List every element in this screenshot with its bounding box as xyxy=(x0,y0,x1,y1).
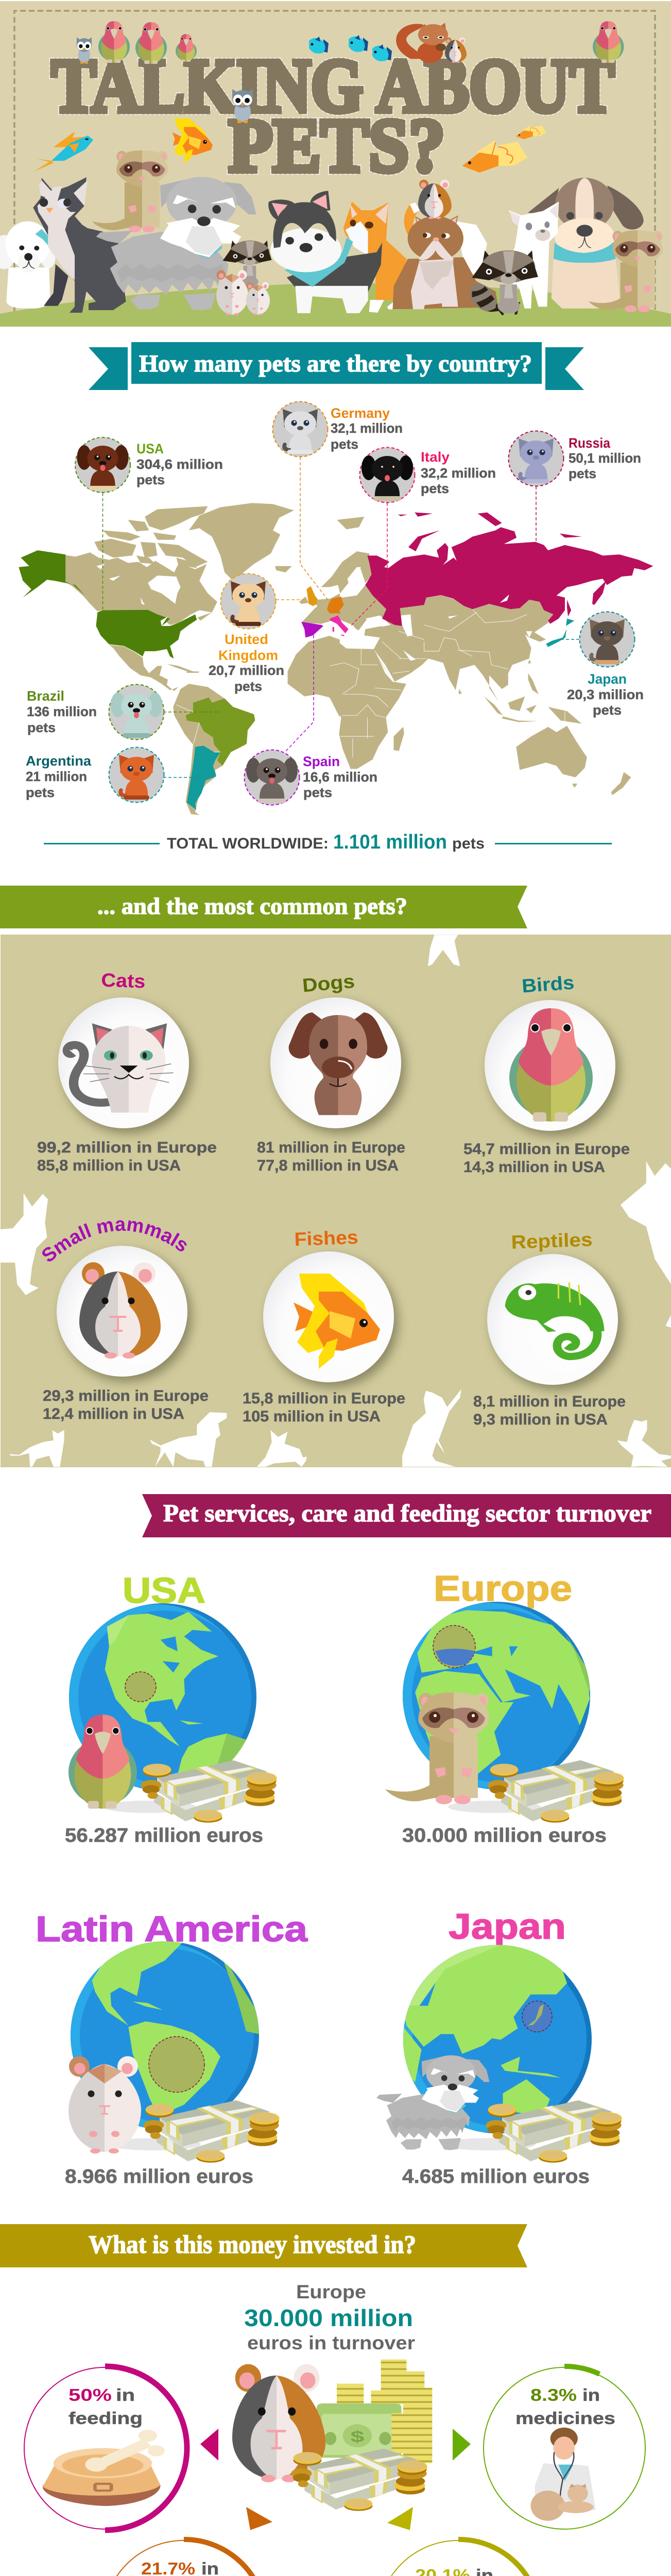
total worldwide xyxy=(44,831,612,853)
callout: USA: pets xyxy=(136,472,165,487)
japan xyxy=(546,619,574,647)
plate: small mammals: 29,3 million in Europe xyxy=(43,1387,209,1404)
circle: medicines: medicines xyxy=(515,2409,615,2428)
icon: bowl and bone xyxy=(43,2430,165,2506)
usa xyxy=(96,610,197,658)
callout: Japan: 20,3 million xyxy=(567,687,644,702)
banner: how many pets: How many pets are there by country? xyxy=(139,350,532,377)
plate: fishes: Fishes xyxy=(294,1227,358,1250)
circle: accessories xyxy=(103,2539,265,2576)
plate: small mammals xyxy=(42,1220,209,1422)
callout: United Kingdom: United xyxy=(225,632,268,647)
region: Europe turnover: 30.000 million euros xyxy=(402,1825,607,1846)
plate: fishes xyxy=(243,1227,405,1425)
callout: Spain: 16,6 million xyxy=(303,769,377,785)
icon: big dog xyxy=(528,178,644,309)
plate: reptiles: 8,1 million in Europe xyxy=(473,1393,626,1410)
callout: Spain: pets xyxy=(303,785,332,800)
text: Europe turnover headline: 30.000 million xyxy=(244,2304,413,2331)
plate: cats: Cats xyxy=(101,970,146,992)
icon: small raccoon xyxy=(223,241,271,287)
callout: USA xyxy=(75,437,223,493)
plate: reptiles: 9,3 million in USA xyxy=(473,1411,608,1428)
callout: Argentina xyxy=(26,747,164,803)
uk xyxy=(306,586,320,606)
callout: Russia: pets xyxy=(569,466,596,481)
hero panel: title and pets xyxy=(0,1,671,327)
icon: birds on title xyxy=(77,21,624,123)
callout lines xyxy=(103,457,579,777)
icon: tall ferret xyxy=(92,150,168,232)
banner: what is this money invested in: What is this money invested in? xyxy=(89,2230,416,2259)
spain xyxy=(301,622,323,637)
icon: orange cat xyxy=(343,201,487,313)
callout: USA: 304,6 million xyxy=(136,456,223,472)
text: Europe turnover headline: Europe xyxy=(296,2281,366,2302)
illustration: guinea pig with money: $ xyxy=(350,2427,364,2445)
icon: brown cat with guinea pig xyxy=(392,180,498,309)
ground xyxy=(0,283,671,327)
plate: birds: 14,3 million in USA xyxy=(463,1159,605,1176)
circle: medicines xyxy=(484,2366,645,2529)
plate: small mammals: 12,4 million in USA xyxy=(43,1405,184,1422)
banner: sector turnover: Pet services, care and feeding sector turnover xyxy=(163,1500,651,1527)
icon: white cat xyxy=(502,201,559,309)
callout: Germany xyxy=(273,402,403,456)
callout: Russia xyxy=(509,431,641,486)
circle: medicines: 8.3% xyxy=(530,2385,577,2404)
region: USA turnover: USA xyxy=(123,1570,205,1611)
callout: Japan: pets xyxy=(593,702,622,718)
banner: most common pets: ... and the most common pets? xyxy=(97,893,407,919)
callout: Russia: Russia xyxy=(569,435,611,451)
plate: dogs: 81 million in Europe xyxy=(257,1139,405,1156)
callout: Germany: 32,1 million xyxy=(331,420,403,436)
total worldwide: TOTAL WORLDWIDE: xyxy=(167,835,329,852)
callout: Russia: 50,1 million xyxy=(569,450,641,466)
icon: raccoon xyxy=(470,250,538,315)
plate: dogs: Dogs xyxy=(301,971,356,996)
alaska xyxy=(19,550,85,598)
total worldwide: 1.101 million xyxy=(333,831,447,853)
hudson bay xyxy=(148,575,180,604)
circle: services xyxy=(377,2539,539,2576)
circle: feeding: 50% xyxy=(68,2385,112,2404)
callout: Germany: Germany xyxy=(331,405,390,421)
title: Talking about pets: PETS? xyxy=(229,104,445,188)
plate: small mammals: Small mammals xyxy=(42,1220,186,1261)
western hemisphere xyxy=(19,503,340,815)
silhouettes xyxy=(0,935,671,1467)
globe xyxy=(398,1941,595,2137)
icon: husky xyxy=(268,191,382,313)
italy xyxy=(330,616,349,636)
callout: Brazil: Brazil xyxy=(27,688,64,704)
banner: how many pets xyxy=(89,342,584,390)
plate: dogs xyxy=(257,971,405,1174)
callout: Italy: 32,2 million xyxy=(421,465,496,481)
western europe and africa xyxy=(301,594,340,625)
region: Europe turnover xyxy=(385,1568,624,1846)
callout: Italy: pets xyxy=(421,481,449,496)
icon: black and white cat xyxy=(33,177,126,313)
banner: sector turnover xyxy=(142,1494,671,1537)
plate: reptiles: Reptiles xyxy=(511,1229,593,1253)
icon: vet with cat xyxy=(530,2428,596,2521)
greenland xyxy=(189,503,294,581)
plate: birds: 54,7 million in Europe xyxy=(463,1141,630,1158)
arrows xyxy=(200,2429,471,2530)
banner: most common pets xyxy=(0,886,527,928)
plate: cats: 85,8 million in USA xyxy=(37,1157,181,1174)
title: Talking about pets xyxy=(51,44,614,188)
circle: feeding xyxy=(24,2366,187,2530)
callout: Japan xyxy=(567,612,644,718)
region: USA turnover xyxy=(64,1570,277,1846)
callout: United Kingdom: Kingdom xyxy=(218,648,278,663)
globe xyxy=(398,1600,592,1789)
russia xyxy=(365,513,653,626)
callout: Germany: pets xyxy=(331,436,358,452)
globe xyxy=(64,1602,259,1794)
callout: Italy: Italy xyxy=(421,449,450,465)
callout: Spain: Spain xyxy=(303,754,340,769)
circle: medicines: in xyxy=(582,2385,600,2404)
plate: birds xyxy=(463,972,630,1176)
illustration: guinea pig with money xyxy=(232,2360,432,2511)
plate: reptiles xyxy=(473,1229,626,1428)
eastern hemisphere xyxy=(288,513,653,795)
south america xyxy=(173,684,255,815)
brazil xyxy=(186,698,255,766)
argentina xyxy=(187,746,220,810)
text: Europe turnover headline: euros in turnover xyxy=(247,2332,415,2353)
plate: cats xyxy=(37,970,217,1174)
icon: hamsters xyxy=(216,270,270,315)
banner: what is this money invested in xyxy=(0,2224,527,2267)
callout: Italy xyxy=(359,447,496,503)
callout: Brazil: pets xyxy=(27,720,56,735)
mexico and central america xyxy=(109,645,178,691)
region: Japan turnover: Japan xyxy=(449,1906,566,1946)
region: Latin America turnover: 8.966 million euros xyxy=(65,2166,253,2188)
icon: schnauzer xyxy=(96,177,256,310)
callout: Argentina: Argentina xyxy=(26,753,92,769)
germany xyxy=(327,597,344,614)
region: Latin America turnover xyxy=(36,1909,308,2188)
callout: United Kingdom xyxy=(209,574,284,694)
icon: fishes xyxy=(34,35,546,173)
circle: feeding: in xyxy=(116,2385,135,2404)
callout: USA: USA xyxy=(136,441,164,456)
callout: Japan: Japan xyxy=(588,671,627,687)
callout: Spain xyxy=(244,750,377,805)
globe xyxy=(65,1937,263,2133)
region: Japan turnover xyxy=(376,1906,622,2188)
callout: Brazil: 136 million xyxy=(27,704,97,719)
callout: Argentina: 21 million xyxy=(26,769,87,784)
icon: squirrel and guinea pig xyxy=(396,23,467,63)
callout: Brazil xyxy=(27,684,164,740)
circle: feeding: feeding xyxy=(68,2409,143,2428)
icon: poodle xyxy=(0,222,56,309)
plate: birds: Birds xyxy=(521,972,575,996)
icon: right ferret xyxy=(589,230,663,312)
plate: fishes: 15,8 million in Europe xyxy=(243,1390,405,1407)
total worldwide: pets xyxy=(452,835,485,852)
region: Latin America turnover: Latin America xyxy=(36,1909,308,1949)
title: Talking about pets: PETS? xyxy=(229,104,445,188)
plate: fishes: 105 million in USA xyxy=(243,1408,381,1425)
text: Europe turnover headline xyxy=(244,2281,415,2353)
callout: United Kingdom: 20,7 million xyxy=(209,663,284,678)
callout: United Kingdom: pets xyxy=(234,679,262,694)
world map xyxy=(19,457,653,815)
callout: Argentina: pets xyxy=(26,785,55,800)
region: USA turnover: 56.287 million euros xyxy=(65,1825,263,1846)
plate: cats: 99,2 million in Europe xyxy=(37,1139,217,1156)
panel: most common pets xyxy=(1,935,671,1467)
plate: dogs: 77,8 million in USA xyxy=(257,1157,399,1174)
region: Japan turnover: 4.685 million euros xyxy=(402,2166,590,2188)
region: Europe turnover: Europe xyxy=(434,1568,572,1608)
